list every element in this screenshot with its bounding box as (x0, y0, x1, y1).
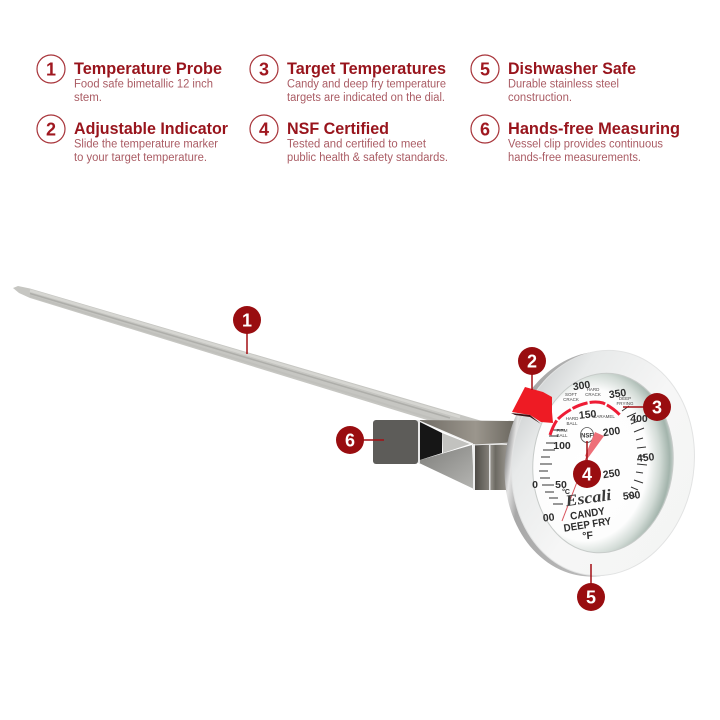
callout 3 (623, 393, 671, 421)
callout 3: 3 (652, 398, 662, 418)
feature 3: target temperatures: 3 (259, 60, 269, 80)
feature 4: NSF certified: Tested and certified to meet (287, 138, 427, 150)
dial numbers: 500 (622, 489, 641, 503)
thermometer probe stem (13, 286, 482, 424)
dial numbers: 100 (553, 440, 571, 452)
dial numbers: 250 (602, 467, 621, 481)
clip end plate (373, 420, 418, 464)
dial numbers: 150 (578, 408, 597, 422)
callout 4: 4 (582, 464, 592, 484)
feature 4: NSF certified: 4 (259, 120, 269, 140)
dial numbers: 200 (602, 425, 621, 439)
callout 1 (233, 306, 261, 354)
feature 2: adjustable indicator (37, 115, 228, 164)
thermometer dial (490, 338, 709, 589)
feature 3: target temperatures: Target Temperatures (287, 59, 446, 78)
feature 1: temperature probe: Food safe bimetallic 12 inch (74, 78, 213, 90)
feature 1: temperature probe: Temperature Probe (74, 59, 222, 78)
vessel clip (373, 420, 515, 490)
feature 5: dishwasher safe (471, 55, 636, 104)
dial numbers: 00 (542, 511, 555, 525)
dial face (524, 366, 682, 560)
tick marks (539, 406, 647, 504)
feature 1: temperature probe: stem. (74, 92, 102, 104)
temperature target arc (550, 402, 620, 435)
NSF badge (580, 428, 594, 442)
feature 5: dishwasher safe: 5 (480, 60, 490, 80)
candy stage labels: SOFT (565, 392, 577, 397)
candy stage labels: BALL (556, 433, 568, 438)
candy stage labels: BALL (566, 421, 578, 426)
callout 5 (577, 564, 605, 611)
candy stage labels: CRACK (585, 392, 601, 397)
candy stage labels: HARD (587, 387, 600, 392)
dial rim (497, 338, 709, 588)
feature 2: adjustable indicator: to your target temperature. (74, 152, 207, 164)
feature 6: hands-free measuring: Vessel clip provides continuous (508, 138, 663, 150)
dial numbers: 350 (608, 387, 627, 401)
candy stage labels: FRYING (617, 401, 634, 406)
dial side wall (490, 339, 704, 589)
feature 6: hands-free measuring (471, 115, 680, 164)
callout 5: 5 (586, 588, 596, 608)
feature 1: temperature probe: 1 (46, 60, 56, 80)
dial caption: CANDY (569, 505, 606, 523)
candy stage labels: CARAMEL (593, 414, 615, 419)
adjustable red marker (511, 387, 553, 424)
feature 4: NSF certified: public health & safety standards. (287, 152, 448, 164)
feature 5: dishwasher safe: Dishwasher Safe (508, 59, 636, 78)
feature 3: target temperatures (250, 55, 446, 104)
dial caption (563, 505, 612, 543)
candy stage labels (556, 387, 634, 438)
NSF badge: NSF (581, 434, 593, 440)
feature 2: adjustable indicator: Slide the temperature marker (74, 138, 218, 150)
feature 6: hands-free measuring: 6 (480, 120, 490, 140)
panel: feature list (37, 55, 680, 164)
callout 2: 2 (527, 352, 537, 372)
dial numbers: 0 (532, 479, 538, 491)
callout 1: 1 (242, 310, 252, 330)
feature 5: dishwasher safe: Durable stainless steel (508, 78, 619, 90)
callout 6 (336, 426, 384, 454)
feature 1: temperature probe (37, 55, 222, 104)
dial numbers: 400 (630, 413, 648, 425)
callout 4 (573, 441, 601, 488)
dial numbers: 450 (636, 451, 655, 465)
callout 2 (518, 347, 546, 390)
feature 3: target temperatures: Candy and deep fry temperature (287, 78, 446, 90)
feature 6: hands-free measuring: hands-free measurements. (508, 152, 641, 164)
feature 4: NSF certified (250, 115, 448, 164)
dial numbers: 300 (572, 379, 591, 393)
feature 2: adjustable indicator: 2 (46, 120, 56, 140)
feature 3: target temperatures: targets are indicated on the dial. (287, 92, 445, 104)
dial numbers (532, 379, 655, 525)
callout 6: 6 (345, 430, 355, 450)
feature 2: adjustable indicator: Adjustable Indicator (74, 119, 228, 138)
temperature needle (562, 432, 604, 521)
dial numbers: 50 (555, 479, 567, 491)
dial numbers: °C (562, 488, 570, 496)
feature 5: dishwasher safe: construction. (508, 92, 572, 104)
candy stage labels: FIRM (556, 428, 568, 433)
feature 6: hands-free measuring: Hands-free Measuring (508, 119, 680, 138)
candy stage labels: HARD (566, 416, 579, 421)
candy stage labels: DEEP (619, 396, 631, 401)
Escali logo: Escali (563, 487, 613, 510)
dial caption: DEEP FRY (563, 515, 612, 535)
candy stage labels: CRACK (563, 397, 579, 402)
dial caption: °F (582, 529, 594, 543)
feature 4: NSF certified: NSF Certified (287, 119, 389, 138)
